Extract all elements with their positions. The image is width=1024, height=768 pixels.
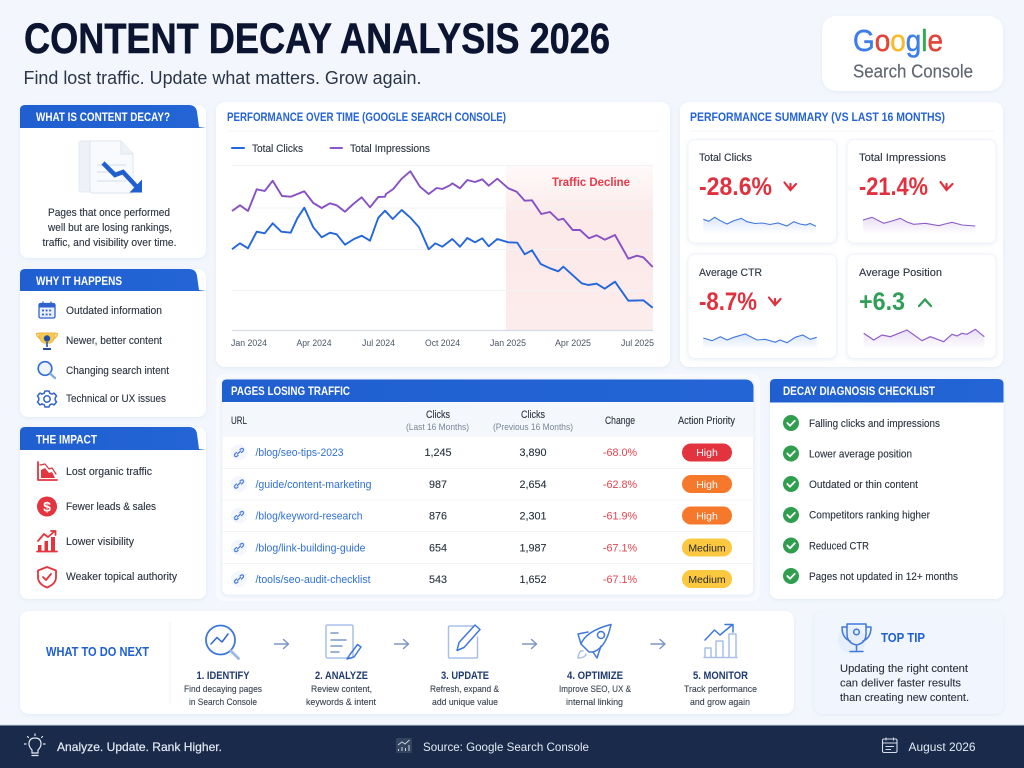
row: keyword research: High: [696, 510, 718, 522]
x axis labels: Oct 2024: [425, 338, 460, 349]
metric card: total impressions: Total Impressions: [859, 152, 947, 164]
description text: well but are losing rankings,: [47, 222, 172, 234]
label: changing search intent: Changing search intent: [66, 365, 169, 377]
logo card: Google Search Console: Search Console: [853, 62, 973, 82]
icon: calendar: [882, 738, 897, 752]
chart heading: PERFORMANCE OVER TIME (GOOGLE SEARCH CONSOLE): [227, 110, 506, 124]
row: seo tips: 1,245: [424, 447, 452, 459]
metric card: total clicks: Total Clicks: [699, 152, 753, 164]
tip heading: TOP TIP: [881, 631, 925, 645]
table column headers: Clicks: [426, 409, 450, 421]
legend: Total Clicks: [252, 143, 304, 155]
logo card: Google Search Console: [822, 16, 1003, 91]
icon: dollar circle: $: [43, 498, 51, 514]
row: content marketing: 2,654: [519, 479, 547, 491]
step 5: monitor: [684, 624, 757, 708]
panel header: what is content decay: [20, 105, 206, 128]
panel: top tip: [814, 611, 1004, 714]
icon: decaying document: [79, 141, 142, 193]
icon: gear: [38, 391, 56, 407]
arrow 1: [274, 640, 288, 648]
footer tagline: Analyze. Update. Rank Higher.: [57, 740, 222, 754]
row: keyword research: -61.9%: [603, 510, 637, 522]
panel header: the impact: [20, 427, 206, 450]
panel: why it happens: [20, 269, 206, 417]
step 4: optimize: internal linking: [566, 697, 623, 708]
label: lost organic traffic: Lost organic traffic: [66, 466, 153, 478]
summary heading: PERFORMANCE SUMMARY (VS LAST 16 MONTHS): [690, 110, 945, 124]
tip text: than creating new content.: [840, 692, 969, 704]
item: falling clicks: [783, 415, 941, 431]
title: CONTENT DECAY ANALYSIS 2026: [24, 15, 610, 63]
label: fewer leads and sales: Fewer leads & sales: [66, 501, 157, 513]
icon: source chart: [396, 738, 412, 753]
subtitle: Find lost traffic. Update what matters. Grow again.: [24, 67, 422, 88]
row: link building guide: /blog/link-building-guide: [256, 542, 366, 554]
item: pages not updated: [783, 568, 959, 584]
item: lower average position: [783, 446, 912, 462]
table header bar: [222, 380, 754, 402]
icon: falling traffic chart: [38, 462, 57, 480]
panel: what is content decay: [20, 105, 206, 258]
description text: [42, 207, 176, 249]
label: lower visibility: Lower visibility: [66, 536, 135, 548]
table column headers: Change: [605, 415, 635, 427]
row: seo audit checklist: [231, 570, 732, 588]
label: outdated information: Outdated information: [66, 305, 162, 317]
table column headers: (Previous 16 Months): [493, 422, 573, 433]
tip text: can deliver faster results: [840, 678, 962, 690]
panel: performance summary: [680, 102, 1003, 367]
step 2: analyze: [306, 625, 376, 708]
footer date: August 2026: [908, 740, 976, 754]
row: link building guide: [231, 538, 732, 556]
row: content marketing: 987: [429, 479, 447, 491]
item: reduced ctr: [783, 538, 869, 554]
row: content marketing: High: [696, 479, 718, 491]
step 3: update: Refresh, expand &: [430, 684, 500, 695]
step 1: identify: [184, 626, 262, 708]
row: link building guide: Medium: [688, 542, 726, 554]
decline highlight zone: [506, 165, 653, 330]
metric card: average ctr: Average CTR: [699, 267, 762, 279]
row: keyword research: 876: [429, 510, 447, 522]
metric card: total clicks: -28.6%: [699, 173, 772, 201]
row: seo audit checklist: -67.1%: [603, 574, 637, 586]
tip text: Updating the right content: [840, 663, 968, 675]
footer bar: [0, 725, 1024, 768]
panel: performance over time chart: [216, 102, 670, 367]
panel header: what is content decay: WHAT IS CONTENT DECAY?: [36, 110, 170, 124]
line: total impressions: [232, 171, 653, 267]
panel: what to do next: [20, 611, 794, 714]
icon: shield check: [38, 567, 56, 588]
panel header: why it happens: [20, 269, 206, 291]
callout: traffic decline: Traffic Decline: [552, 175, 630, 189]
step 2: analyze: 2. ANALYZE: [315, 670, 368, 682]
metric card: average position: [847, 254, 996, 358]
x axis labels: Jul 2025: [621, 338, 654, 349]
icon: dollar circle: [37, 496, 57, 516]
x axis labels: Jan 2025: [490, 338, 526, 349]
panel: decay diagnosis checklist: [770, 379, 1004, 599]
arrow 4: [651, 640, 665, 648]
table header bar: PAGES LOSING TRAFFIC: [231, 384, 350, 398]
table column headers: URL: [231, 415, 247, 427]
metric card: total impressions: -21.4%: [859, 173, 928, 201]
icon: magnifier: [38, 362, 55, 378]
label: weaker topical authority: Weaker topical authority: [66, 571, 178, 583]
item: lower average position: Lower average position: [809, 448, 912, 460]
arrow 2: [394, 640, 408, 648]
icon: bars with arrow: [37, 531, 57, 552]
row: content marketing: -62.8%: [603, 479, 637, 491]
checklist header: DECAY DIAGNOSIS CHECKLIST: [783, 384, 936, 398]
icon: trophy: [838, 624, 871, 654]
line: total clicks: [232, 208, 653, 308]
icon: calendar: [39, 302, 55, 318]
icon: edit pencil: [448, 625, 480, 658]
x axis labels: Jan 2024: [231, 338, 267, 349]
row: link building guide: -67.1%: [603, 542, 637, 554]
item: competitors ranking higher: Competitors ranking higher: [809, 510, 930, 522]
icon: rocket: [578, 624, 611, 658]
row: link building guide: 1,987: [519, 542, 547, 554]
row: seo audit checklist: 543: [429, 574, 447, 586]
table column headers: Clicks: [521, 409, 545, 421]
x axis labels: [231, 338, 654, 349]
label: newer better content: Newer, better content: [66, 335, 162, 347]
icon: magnifier with trend: [206, 626, 238, 658]
icon: growth bars: [704, 624, 737, 658]
step 1: identify: Find decaying pages: [184, 684, 262, 695]
label: technical or ux issues: Technical or UX issues: [66, 393, 167, 405]
row: seo tips: [231, 444, 732, 462]
item: competitors ranking higher: [783, 507, 930, 523]
next steps heading: WHAT TO DO NEXT: [46, 645, 149, 659]
icon: light bulb: [24, 734, 45, 756]
table column headers: Action Priority: [678, 415, 736, 427]
table column headers: (Last 16 Months): [406, 422, 469, 433]
row: keyword research: /blog/keyword-research: [256, 510, 362, 522]
metric card: average ctr: -8.7%: [699, 288, 757, 316]
step 5: monitor: 5. MONITOR: [693, 670, 748, 682]
step 5: monitor: and grow again: [690, 697, 750, 708]
row: keyword research: 2,301: [519, 510, 547, 522]
row: seo audit checklist: /tools/seo-audit-checklist: [256, 574, 370, 586]
step 1: identify: 1. IDENTIFY: [196, 670, 250, 682]
x axis labels: Jul 2024: [362, 338, 395, 349]
metric card: total clicks: [688, 140, 836, 243]
metric card: average ctr: [688, 254, 836, 358]
step 3: update: [430, 625, 500, 708]
x axis labels: Apr 2025: [555, 338, 591, 349]
row: keyword research: [231, 506, 732, 524]
legend: [232, 143, 431, 155]
item: outdated content: Outdated or thin content: [809, 479, 918, 491]
step 4: optimize: Improve SEO, UX &: [559, 684, 632, 695]
step 4: optimize: 4. OPTIMIZE: [567, 670, 623, 682]
panel header: the impact: THE IMPACT: [36, 432, 98, 446]
step 5: monitor: Track performance: [684, 684, 757, 695]
row: seo tips: 3,890: [519, 447, 547, 459]
row: link building guide: 654: [429, 542, 447, 554]
row: content marketing: /guide/content-marketing: [256, 479, 372, 491]
row: seo tips: -68.0%: [603, 447, 637, 459]
step 1: identify: in Search Console: [189, 697, 257, 708]
panel: pages losing traffic: [216, 374, 760, 601]
row: seo tips: /blog/seo-tips-2023: [256, 447, 344, 459]
legend: Total Impressions: [350, 143, 431, 155]
row: seo tips: High: [696, 447, 718, 459]
metric card: average position: Average Position: [859, 267, 942, 279]
step 2: analyze: Review content,: [311, 684, 372, 695]
arrow 3: [522, 640, 536, 648]
panel: the impact: [20, 427, 206, 599]
logo card: Google Search Console: Google: [853, 23, 943, 58]
step 4: optimize: [559, 624, 632, 708]
step 3: update: 3. UPDATE: [441, 670, 489, 682]
item: falling clicks: Falling clicks and impressions: [809, 418, 941, 430]
item: reduced ctr: Reduced CTR: [809, 540, 869, 552]
row: seo audit checklist: Medium: [688, 574, 726, 586]
panel header: why it happens: WHY IT HAPPENS: [36, 274, 122, 288]
metric card: average position: +6.3: [859, 288, 905, 316]
step 2: analyze: keywords & intent: [306, 697, 376, 708]
item: pages not updated: Pages not updated in 12+ months: [809, 571, 959, 583]
item: outdated content: [783, 476, 918, 492]
footer source: Source: Google Search Console: [423, 740, 589, 754]
x axis labels: Apr 2024: [296, 338, 332, 349]
step 3: update: add unique value: [432, 697, 498, 708]
tip text: [840, 663, 969, 704]
description text: Pages that once performed: [48, 207, 170, 219]
checklist header: [770, 379, 1004, 402]
metric card: total impressions: [847, 140, 996, 243]
icon: trophy with pin: [36, 333, 58, 349]
row: content marketing: [231, 475, 732, 493]
row: seo audit checklist: 1,652: [519, 574, 547, 586]
table column headers: [222, 402, 754, 437]
icon: document with pen: [326, 625, 361, 659]
description text: traffic, and visibility over time.: [42, 237, 176, 249]
